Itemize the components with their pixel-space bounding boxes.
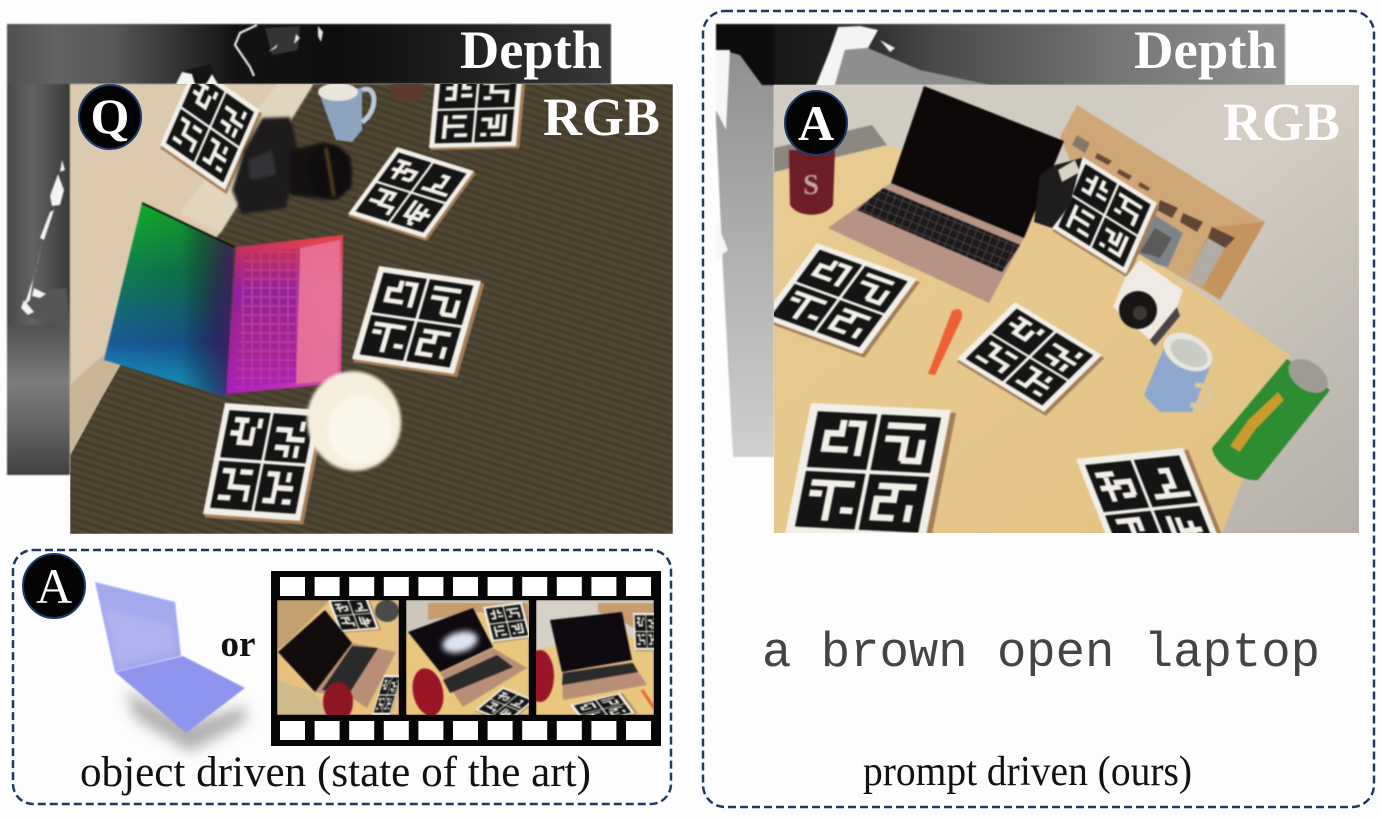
chair xyxy=(1060,105,1265,300)
film strip xyxy=(271,571,661,746)
mug xyxy=(1144,332,1214,413)
dashed border xyxy=(703,11,1374,807)
wall and baseboard xyxy=(70,84,313,455)
red object xyxy=(390,84,426,102)
table top xyxy=(774,145,1290,534)
mug xyxy=(318,83,374,142)
caption: prompt driven: prompt driven (ours) xyxy=(863,749,1192,795)
sprocket holes bottom xyxy=(280,721,651,740)
badge A xyxy=(23,554,85,618)
aruco markers xyxy=(774,156,1222,533)
green can xyxy=(1212,352,1334,480)
sprocket holes top xyxy=(280,577,651,596)
depth label: Depth xyxy=(460,20,602,80)
orange spoon xyxy=(928,309,962,375)
laptop with colored pose overlay xyxy=(104,203,343,397)
depth label: Depth xyxy=(1134,20,1277,80)
badge A: A xyxy=(798,95,834,151)
or label: or xyxy=(221,624,255,665)
laptop xyxy=(828,86,1082,303)
aruco markers xyxy=(159,65,526,525)
rgb label: RGB xyxy=(543,87,660,147)
panel: prompt driven answer xyxy=(703,11,1374,807)
badge Q xyxy=(79,85,141,149)
badge Q: Q xyxy=(91,88,129,144)
prompt text: a brown open laptop xyxy=(762,625,1320,681)
badge A xyxy=(785,91,847,155)
depth map: table scene xyxy=(716,24,1285,457)
film frame 1 xyxy=(277,600,399,715)
badge A: A xyxy=(36,558,72,614)
white bowl xyxy=(304,368,404,474)
icon: blue point cloud laptop xyxy=(95,582,246,752)
film frame 3 xyxy=(536,600,654,715)
rgb label: RGB xyxy=(1223,92,1340,152)
camera xyxy=(232,117,354,214)
rgb photo: carpet scene xyxy=(70,65,673,534)
rgb photo: table scene xyxy=(774,85,1359,533)
panel: query scene xyxy=(7,20,673,534)
red stanford bottle xyxy=(789,150,835,215)
panel: object driven answer xyxy=(13,550,671,804)
caption: object driven: object driven (state of the art) xyxy=(80,749,591,796)
instant camera xyxy=(1113,260,1183,346)
dashed border xyxy=(13,550,671,804)
film frame 2 xyxy=(406,600,529,715)
depth map: query xyxy=(7,24,611,475)
red stanford bottle: S xyxy=(803,170,819,201)
